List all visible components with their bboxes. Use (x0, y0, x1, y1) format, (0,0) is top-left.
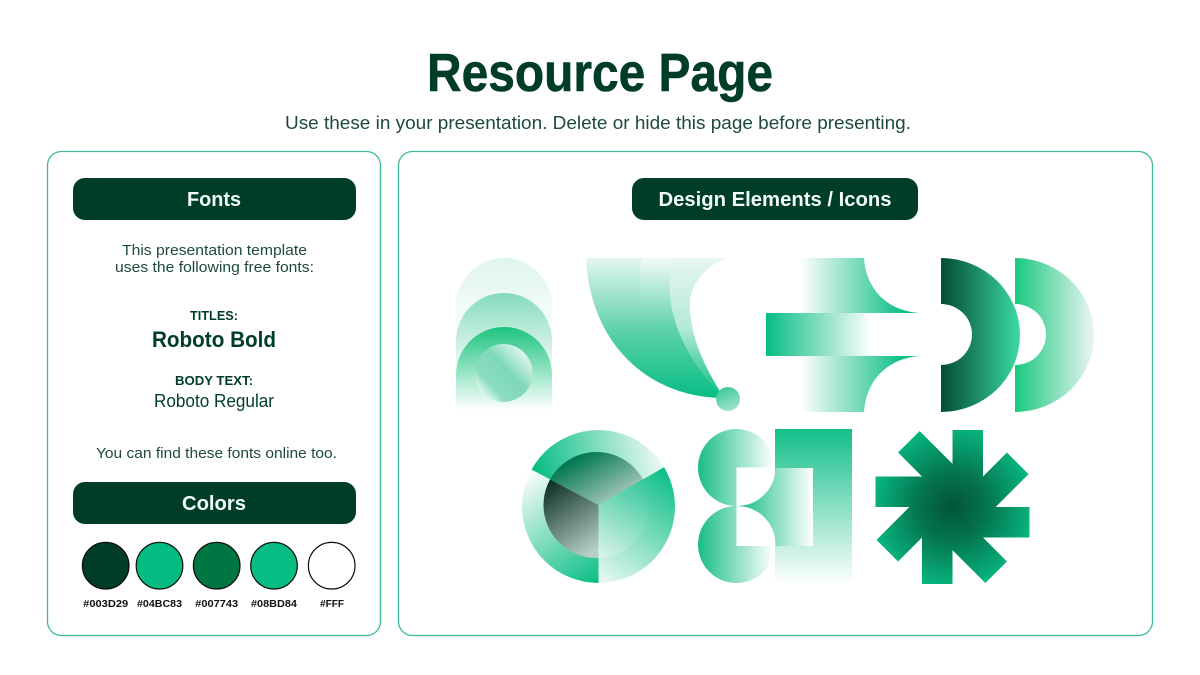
text: body font (154, 374, 274, 411)
heading: design elements: Design Elements / Icons (658, 189, 892, 211)
text: titles font: Roboto Bold (152, 327, 276, 352)
panel: fonts and colors (48, 152, 380, 636)
text: body font: BODY TEXT: (175, 374, 253, 388)
text: titles font: TITLES: (190, 309, 238, 323)
text: find fonts: You can find these fonts online too. (96, 446, 337, 462)
panel: design elements (398, 152, 1152, 636)
text: titles font (152, 309, 276, 352)
heading: colors (73, 482, 356, 524)
color swatches (82, 542, 355, 589)
title: Resource Page (427, 43, 773, 103)
icon: double D arcs (941, 258, 1094, 412)
text: intro: uses the following free fonts: (115, 260, 314, 276)
color labels: #04BC83 (137, 598, 182, 610)
text: intro: This presentation template (122, 243, 307, 259)
icon: segmented circle (522, 430, 675, 583)
color labels (83, 598, 345, 610)
icon: figure eight and squares (698, 429, 852, 584)
color labels: #003D29 (83, 598, 128, 610)
subtitle: Use these in your presentation. Delete or hide this page before presenting. (285, 112, 911, 133)
heading: fonts: Fonts (187, 189, 241, 211)
icon: layered leaf (586, 258, 740, 411)
text: intro (115, 243, 314, 276)
heading: design elements (632, 178, 918, 220)
text: body font: Roboto Regular (154, 391, 274, 411)
icon: plus shape (766, 258, 920, 412)
color labels: #08BD84 (251, 598, 297, 610)
icon: asterisk star (876, 430, 1030, 584)
heading: colors: Colors (182, 493, 246, 515)
color labels: #FFF (320, 598, 345, 610)
icon: stacked arches (456, 258, 552, 411)
color labels: #007743 (195, 598, 238, 610)
heading: fonts (73, 178, 356, 220)
